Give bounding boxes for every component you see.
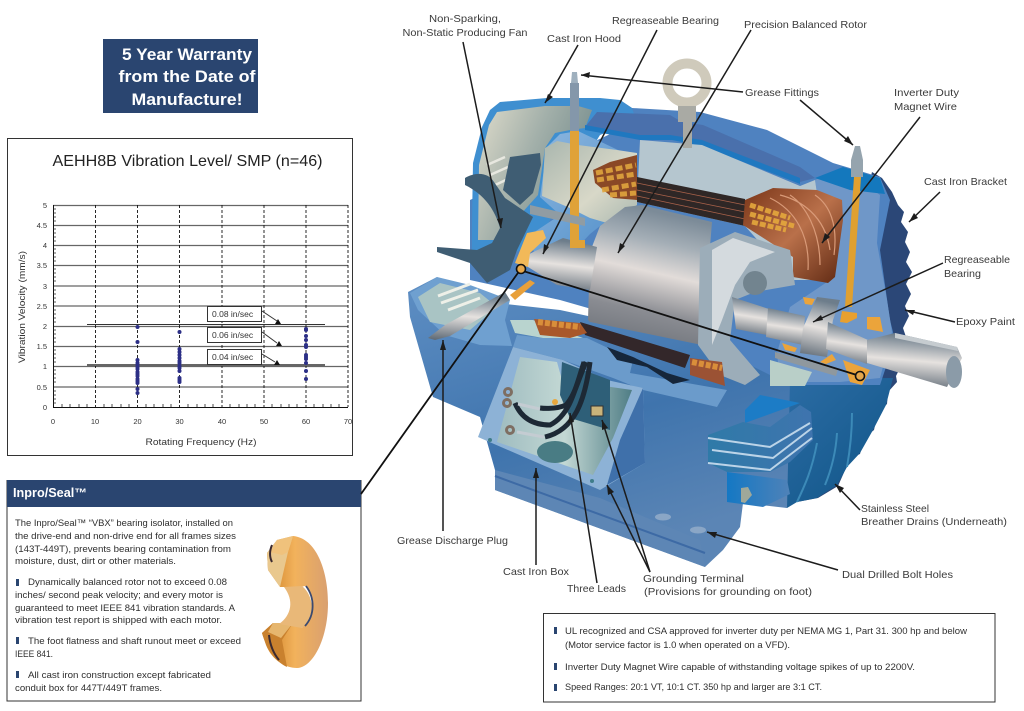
stator laminations: [637, 177, 745, 226]
y axis tick labels: 3.5: [37, 261, 47, 270]
bullet: UL recognized: [554, 626, 967, 651]
label: dual drilled bolt holes: Dual Drilled Bolt Holes: [842, 569, 953, 581]
dark ribbed bracket shell: [790, 172, 912, 502]
bullet: balanced rotor: Dynamically balanced rotor not to exceed 0.08: [28, 577, 227, 588]
label: regreaseable bearing: Regreaseable Bearing: [612, 15, 719, 27]
icon: bolt holes: [655, 514, 706, 534]
bullet: foot flatness: IEEE 841.: [15, 649, 53, 660]
stator back: [637, 140, 830, 280]
drive-end frame band: [513, 335, 727, 407]
label: stainless steel breather drains: Stainless Steel: [861, 503, 929, 515]
grease fitting, left: [570, 72, 585, 248]
leader lines: [443, 30, 955, 583]
y axis tick labels: 0: [43, 403, 47, 412]
label: cast iron bracket: Cast Iron Bracket: [924, 176, 1007, 188]
y axis tick labels: 4.5: [37, 221, 47, 230]
warranty banner: [103, 39, 258, 113]
label: grounding terminal: Grounding Terminal: [643, 573, 744, 585]
bullet: magnet wire: Inverter Duty Magnet Wire capable of withstanding voltage spikes of up to 2200V.: [565, 662, 915, 673]
three leads: [515, 362, 590, 437]
x axis tick labels: 50: [260, 417, 268, 426]
callout: 0.08 in/sec: 0.08 in/sec: [212, 309, 254, 319]
y axis tick labels: [37, 201, 47, 412]
y axis tick labels: 1.5: [37, 342, 47, 351]
cooling slots: [487, 157, 510, 186]
terminal box knockout: [537, 441, 573, 463]
x axis tick labels: 40: [218, 417, 226, 426]
lower-left housing interior: [410, 277, 512, 346]
x axis tick labels: 20: [133, 417, 142, 426]
motor cutaway illustration: [408, 64, 962, 567]
label: grounding terminal: (Provisions for grounding on foot): [644, 586, 812, 598]
label: three leads: Three Leads: [567, 583, 626, 595]
label: epoxy paint: Epoxy Paint: [956, 316, 1015, 328]
center cavity: [542, 141, 637, 223]
x axis tick labels: 30: [175, 417, 184, 426]
axis title: rotating frequency: Rotating Frequency (Hz): [146, 437, 256, 448]
plug: [428, 292, 510, 340]
copper winding, lower: [534, 319, 725, 386]
label: inverter duty magnet wire: [894, 87, 960, 113]
eye bolt: [668, 64, 706, 148]
intro paragraph: [15, 518, 236, 567]
y axis tick labels: 3: [43, 282, 47, 291]
x axis tick labels: 10: [91, 417, 99, 426]
callout: 0.04 in/sec: 0.04 in/sec: [212, 352, 254, 362]
label: stainless steel breather drains: [861, 503, 1007, 528]
terminal box: [478, 347, 645, 490]
x axis tick labels: 60: [302, 417, 310, 426]
bullet: foot flatness: The foot flatness and shaft runout meet or exceed: [28, 636, 241, 647]
bullet: foot flatness: [15, 636, 241, 660]
grounding lug: [591, 406, 603, 416]
right end bracket interior: [777, 168, 892, 382]
foot: [495, 470, 705, 567]
chart title: AEHH8B Vibration Level/ SMP (n=46): [52, 153, 322, 170]
end ring: [698, 232, 795, 385]
top housing shell: [470, 100, 895, 385]
bullet: balanced rotor: [15, 577, 236, 626]
label: stainless steel breather drains: Breather Drains (Underneath): [861, 516, 1007, 528]
label: regreaseable bearing, right: Regreaseable: [944, 254, 1010, 266]
intro paragraph: the drive-end and non-drive end for all frames sizes: [15, 531, 236, 542]
rear interior window: [770, 360, 812, 386]
label: regreaseable bearing, right: Bearing: [944, 268, 981, 280]
main body: [408, 277, 790, 567]
copper winding, right: [743, 188, 843, 283]
y axis tick labels: 2: [43, 322, 47, 331]
rotor cylinder: [588, 205, 712, 345]
drive-end interior window: [510, 320, 583, 338]
y axis tick labels: 0.5: [37, 383, 47, 392]
x axis tick labels: 70: [344, 417, 352, 426]
bullet: balanced rotor: inches/ second peak velocity; and every motor is: [15, 590, 223, 601]
hood rim: [472, 98, 636, 262]
bullet: UL recognized: UL recognized and CSA approved for inverter duty per NEMA MG 1, Part 31. 300 hp and below: [565, 626, 967, 637]
pin, left: [530, 205, 585, 226]
warranty banner: Manufacture!: [132, 90, 242, 109]
panel: vibration chart: [8, 138, 352, 456]
label: non-sparking fan: Non-Sparking,: [429, 13, 501, 25]
reference lines: [87, 324, 325, 326]
label: grease fittings: Grease Fittings: [745, 87, 819, 99]
bullet: cast iron: conduit box for 447T/449T frames.: [15, 683, 162, 694]
callout connector: seal panel to bearings: [361, 264, 864, 494]
x axis tick labels: [51, 417, 352, 426]
label: inverter duty magnet wire: Inverter Duty: [894, 87, 960, 99]
y axis tick labels: 1: [43, 362, 47, 371]
arrowheads: [440, 72, 918, 538]
label: inverter duty magnet wire: Magnet Wire: [894, 101, 957, 113]
bullet: cast iron: All cast iron construction except fabricated: [28, 670, 211, 681]
label: grounding terminal: [643, 573, 812, 598]
copper winding, left: [593, 155, 637, 200]
label: non-sparking fan: [402, 13, 528, 39]
callout: 0.04 in/sec: [208, 350, 280, 365]
warranty banner: from the Date of: [118, 67, 256, 86]
fan: [437, 153, 541, 283]
bullet: balanced rotor: guaranteed to meet IEEE 841 vibration standards. A: [15, 603, 236, 614]
intro paragraph: (143T-449T), prevents bearing contamination from: [15, 544, 231, 555]
grease fitting, right: [840, 146, 863, 323]
label: cast iron hood: Cast Iron Hood: [547, 33, 621, 45]
y axis tick labels: 2.5: [37, 302, 47, 311]
panel: features box: [544, 614, 995, 702]
icon: bearing isolator seal: [262, 536, 328, 668]
x axis tick labels: 0: [51, 417, 55, 426]
bullet: balanced rotor: vibration test report is shipped with each motor.: [15, 615, 222, 626]
label: regreaseable bearing, right: [944, 254, 1010, 280]
label: non-sparking fan: Non-Static Producing Fan: [402, 27, 528, 39]
data points: [136, 325, 308, 395]
intro paragraph: The Inpro/Seal™ “VBX” bearing isolator, installed on: [15, 518, 233, 529]
callout: 0.06 in/sec: 0.06 in/sec: [212, 330, 254, 340]
bearing segments, right: [782, 297, 883, 385]
hood interior: [478, 106, 592, 240]
label: cast iron box: Cast Iron Box: [503, 566, 570, 578]
panel: Inpro/Seal: [7, 480, 361, 701]
bullet: speed ranges: Speed Ranges: 20:1 VT, 10:1 CT. 350 hp and larger are 3:1 CT.: [565, 682, 822, 693]
panel header: Inpro/Seal™: [13, 486, 87, 500]
lower deep-blue end shell: [760, 378, 893, 508]
left shaft: [510, 230, 597, 300]
y axis tick labels: 4: [43, 241, 47, 250]
warranty banner: 5 Year Warranty: [122, 45, 253, 64]
callout: 0.08 in/sec: [208, 306, 281, 324]
y axis tick labels: 5: [43, 201, 47, 210]
top plate: [585, 112, 815, 182]
inner blue wall: [530, 131, 635, 262]
bullet: cast iron: [15, 670, 211, 694]
bullet: UL recognized: (Motor service factor is 1.0 when operated on a VFD).: [565, 640, 790, 651]
intro paragraph: moisture, dust, dirt or other materials.: [15, 556, 176, 567]
label: grease discharge plug: Grease Discharge Plug: [397, 535, 508, 547]
cooling fins: [708, 395, 852, 507]
callout: 0.06 in/sec: [208, 328, 282, 346]
axis title: vibration velocity: Vibration Velocity (mm/s): [17, 251, 28, 363]
label: precision balanced rotor: Precision Balanced Rotor: [744, 19, 868, 31]
right shaft: [732, 297, 962, 388]
pin, right: [775, 352, 838, 376]
panel header: [7, 480, 361, 507]
gridlines: [53, 206, 348, 387]
